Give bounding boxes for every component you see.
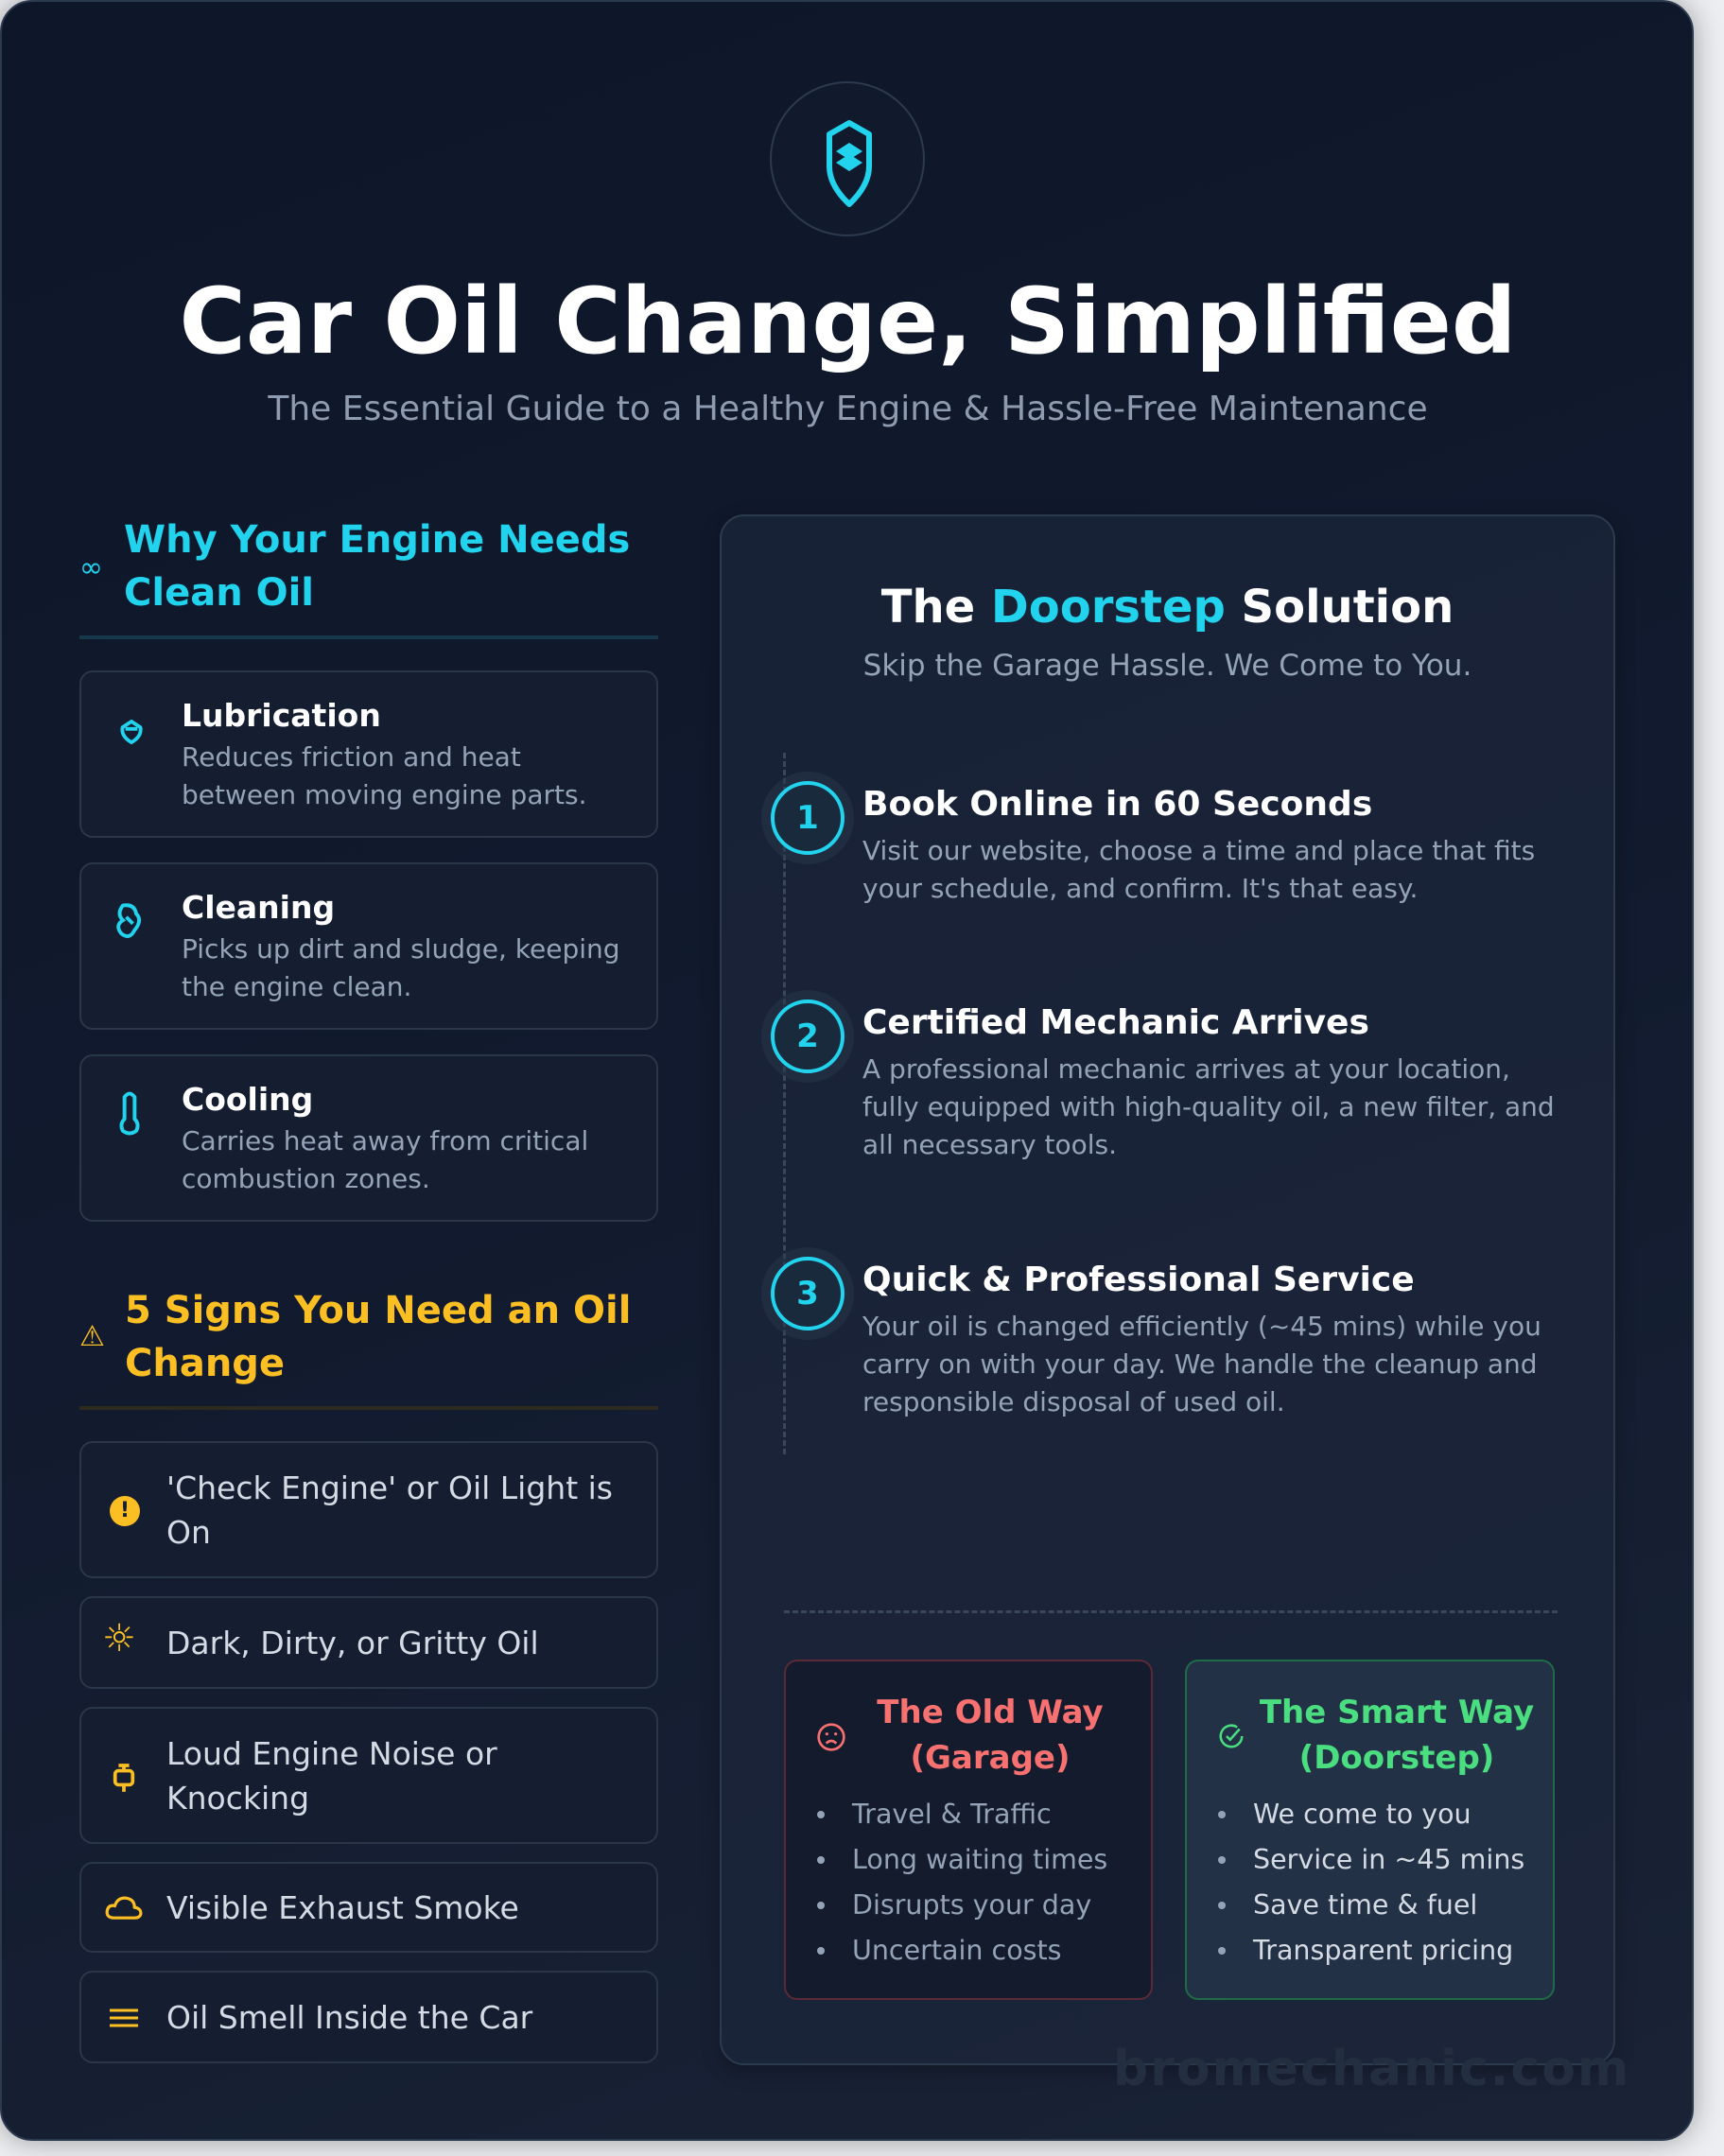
heading: why engine needs clean oil bbox=[79, 513, 658, 639]
heading: why engine needs clean oil: ∞ bbox=[79, 551, 103, 584]
icon: sad face bbox=[817, 1723, 845, 1751]
panel: doorstep solution bbox=[720, 514, 1615, 2065]
step 3: Quick & Professional Service bbox=[862, 1261, 1415, 1299]
timeline line bbox=[783, 753, 786, 1454]
card: cooling: Cooling bbox=[182, 1081, 313, 1118]
comparison: old way: Uncertain costs bbox=[852, 1935, 1062, 1966]
comparison: old way bbox=[784, 1660, 1153, 2000]
divider bbox=[784, 1610, 1558, 1613]
card: cleaning: Cleaning bbox=[182, 889, 335, 926]
watermark: bromechanic.com bbox=[1113, 2041, 1630, 2097]
step 2 bbox=[761, 990, 1555, 1160]
step 2: fully equipped with high-quality oil, a new filter, and bbox=[862, 1091, 1555, 1122]
step 2: 2 bbox=[796, 1017, 819, 1055]
sign: oil smell: Oil Smell Inside the Car bbox=[166, 1999, 532, 2036]
comparison: old way: Travel & Traffic bbox=[852, 1799, 1052, 1830]
card: lubrication: Reduces friction and heat bbox=[182, 741, 521, 773]
comparison: smart way: Service in ~45 mins bbox=[1253, 1844, 1524, 1875]
comparison: smart way: (Doorstep) bbox=[1299, 1739, 1494, 1777]
icon: sun: ☼ bbox=[102, 1617, 136, 1660]
card: lubrication bbox=[79, 670, 658, 838]
icon: engine bbox=[113, 1764, 134, 1792]
sign: check engine: On bbox=[166, 1514, 211, 1551]
sign: exhaust smoke bbox=[79, 1862, 658, 1953]
icon: exclamation: ! bbox=[120, 1499, 130, 1522]
card: lubrication: between moving engine parts. bbox=[182, 779, 586, 810]
card: cleaning bbox=[79, 862, 658, 1030]
comparison: old way: The Old Way bbox=[877, 1694, 1104, 1731]
title: Car Oil Change, Simplified bbox=[179, 269, 1517, 374]
icon: sparkle bbox=[116, 903, 142, 938]
sign: check engine: 'Check Engine' or Oil Light is bbox=[166, 1469, 613, 1506]
icon: lines bbox=[110, 2008, 138, 2027]
sign: loud noise bbox=[79, 1707, 658, 1844]
heading: why engine needs clean oil: Why Your Engine Needs bbox=[124, 518, 630, 562]
card: cooling bbox=[79, 1054, 658, 1222]
sign: loud noise: Loud Engine Noise or bbox=[166, 1735, 497, 1772]
step 1: 1 bbox=[796, 799, 819, 837]
sign: oil smell bbox=[79, 1971, 658, 2063]
sign: dark oil: Dark, Dirty, or Gritty Oil bbox=[166, 1625, 539, 1661]
step 1: Book Online in 60 Seconds bbox=[862, 785, 1372, 824]
heading: 5 signs: Change bbox=[125, 1342, 285, 1385]
comparison: smart way: The Smart Way bbox=[1260, 1694, 1534, 1731]
step 3: carry on with your day. We handle the cleanup and bbox=[862, 1348, 1538, 1380]
heading: 5 signs: ⚠ bbox=[79, 1320, 105, 1353]
heading: 5 signs bbox=[79, 1284, 658, 1410]
card: cooling: combustion zones. bbox=[182, 1163, 430, 1194]
icon: drop bbox=[120, 720, 143, 744]
card: cleaning: Picks up dirt and sludge, keeping bbox=[182, 933, 620, 965]
comparison: smart way: Transparent pricing bbox=[1253, 1935, 1513, 1966]
comparison: old way: Disrupts your day bbox=[852, 1889, 1091, 1921]
icon: shield logo bbox=[770, 81, 925, 236]
card: lubrication: Lubrication bbox=[182, 697, 381, 734]
sign: loud noise: Knocking bbox=[166, 1780, 309, 1817]
comparison: smart way bbox=[1185, 1660, 1555, 2000]
comparison: old way: (Garage) bbox=[910, 1739, 1071, 1777]
sign: exhaust smoke: Visible Exhaust Smoke bbox=[166, 1889, 519, 1926]
icon: cloud bbox=[106, 1897, 142, 1920]
icon: thermometer bbox=[119, 1091, 140, 1135]
comparison: smart way: We come to you bbox=[1253, 1799, 1471, 1830]
card: cleaning: the engine clean. bbox=[182, 971, 411, 1002]
subtitle: The Essential Guide to a Healthy Engine & Hassle-Free Maintenance bbox=[268, 390, 1428, 428]
step 3: 3 bbox=[796, 1275, 819, 1313]
comparison: smart way: Save time & fuel bbox=[1253, 1889, 1477, 1921]
step 3 bbox=[761, 1247, 1541, 1417]
sign: check engine bbox=[79, 1441, 658, 1578]
panel title: The Doorstep Solution bbox=[881, 581, 1454, 634]
step 1 bbox=[761, 772, 1535, 904]
icon: check circle bbox=[1219, 1724, 1243, 1747]
step 3: responsible disposal of used oil. bbox=[862, 1386, 1285, 1417]
step 3: Your oil is changed efficiently (~45 mins) while you bbox=[862, 1311, 1541, 1342]
comparison: old way: Long waiting times bbox=[852, 1844, 1107, 1875]
panel subtitle: Skip the Garage Hassle. We Come to You. bbox=[863, 649, 1471, 683]
heading: 5 signs: 5 Signs You Need an Oil bbox=[125, 1289, 631, 1332]
step 2: Certified Mechanic Arrives bbox=[862, 1003, 1369, 1042]
step 2: A professional mechanic arrives at your location, bbox=[862, 1053, 1510, 1085]
sign: dark oil bbox=[79, 1596, 658, 1689]
step 1: your schedule, and confirm. It's that easy. bbox=[862, 873, 1418, 904]
step 1: Visit our website, choose a time and place that fits bbox=[862, 835, 1535, 866]
card: cooling: Carries heat away from critical bbox=[182, 1125, 588, 1156]
icon: exclamation bbox=[110, 1496, 140, 1526]
step 2: all necessary tools. bbox=[862, 1129, 1117, 1160]
heading: why engine needs clean oil: Clean Oil bbox=[124, 571, 314, 615]
